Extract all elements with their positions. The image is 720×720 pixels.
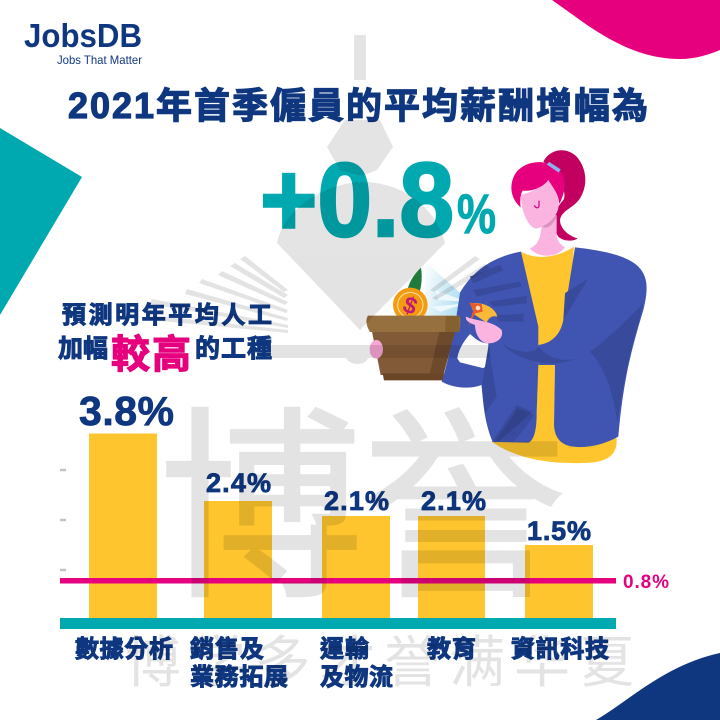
category labels: 銷售及 (190, 636, 264, 663)
watermark: tower emblem (150, 35, 490, 364)
axis ticks (60, 470, 66, 570)
jacket shading (482, 278, 643, 442)
logo wordmark: JobsDB (24, 17, 142, 54)
hand on pot (370, 340, 383, 359)
subtitle: trades with higher forecast increase: 預測明年平均人工 (62, 302, 272, 329)
category labels: 業務拓展 (190, 664, 288, 691)
mouth mark (534, 201, 539, 208)
subtitle: trades with higher forecast increase: 較高 (111, 334, 191, 377)
average line (60, 578, 616, 584)
watermark overlay: 誉 (362, 343, 567, 640)
logo (24, 17, 142, 67)
shirt (492, 247, 617, 463)
bar values: 2.1% (421, 486, 486, 516)
watermark: small line: 博学多才誉满华夏 (125, 618, 635, 699)
category labels: 運輸 (320, 636, 369, 663)
gap between arm and body (457, 334, 488, 368)
neck (530, 215, 565, 256)
plant pot (366, 316, 460, 380)
corner shape: teal left (0, 128, 82, 315)
jacket right panel (538, 247, 647, 447)
category labels: 數據分析 (75, 636, 173, 663)
chart: forecast salary increase by trade (60, 388, 669, 691)
hair (511, 162, 565, 207)
bar values: 2.1% (324, 486, 389, 516)
watermark: large characters: 博 (159, 343, 364, 640)
category labels: 及物流 (320, 664, 393, 691)
subtitle: trades with higher forecast increase: 加幅 (58, 335, 108, 363)
coin (393, 288, 428, 322)
subtitle: trades with higher forecast increase (58, 302, 272, 377)
category labels: 資訊科技 (511, 636, 609, 663)
hand on spray (466, 317, 502, 343)
headline figure: +0.8%: +0.8 (260, 142, 454, 259)
headline figure: +0.8%: % (457, 182, 496, 245)
hair band (547, 162, 561, 173)
jacket left panel and arm (442, 252, 538, 443)
coin: $ (400, 291, 421, 320)
bars (89, 434, 593, 619)
spray gun (468, 303, 497, 327)
face (521, 180, 559, 229)
ponytail (543, 150, 585, 241)
spray beam (425, 262, 470, 316)
logo tagline: Jobs That Matter (57, 53, 142, 67)
bar values: 3.8% (79, 388, 174, 434)
bar values: 2.4% (206, 468, 271, 498)
leaf (407, 268, 422, 291)
bar values (79, 388, 591, 546)
average label: 0.8% (623, 572, 669, 593)
corner shape: navy bottom right (596, 653, 720, 720)
category labels (75, 635, 609, 691)
illustration: woman watering a coin plant (366, 150, 647, 463)
title: 2021年首季僱員的平均薪酬增幅為 (68, 85, 648, 126)
subtitle: trades with higher forecast increase: 的工種 (195, 335, 272, 363)
watermark overlay (125, 35, 635, 699)
bar values: 1.5% (527, 516, 591, 546)
category labels: 教育 (427, 635, 476, 663)
baseline (60, 618, 616, 629)
corner shape: pink top right (552, 0, 720, 59)
